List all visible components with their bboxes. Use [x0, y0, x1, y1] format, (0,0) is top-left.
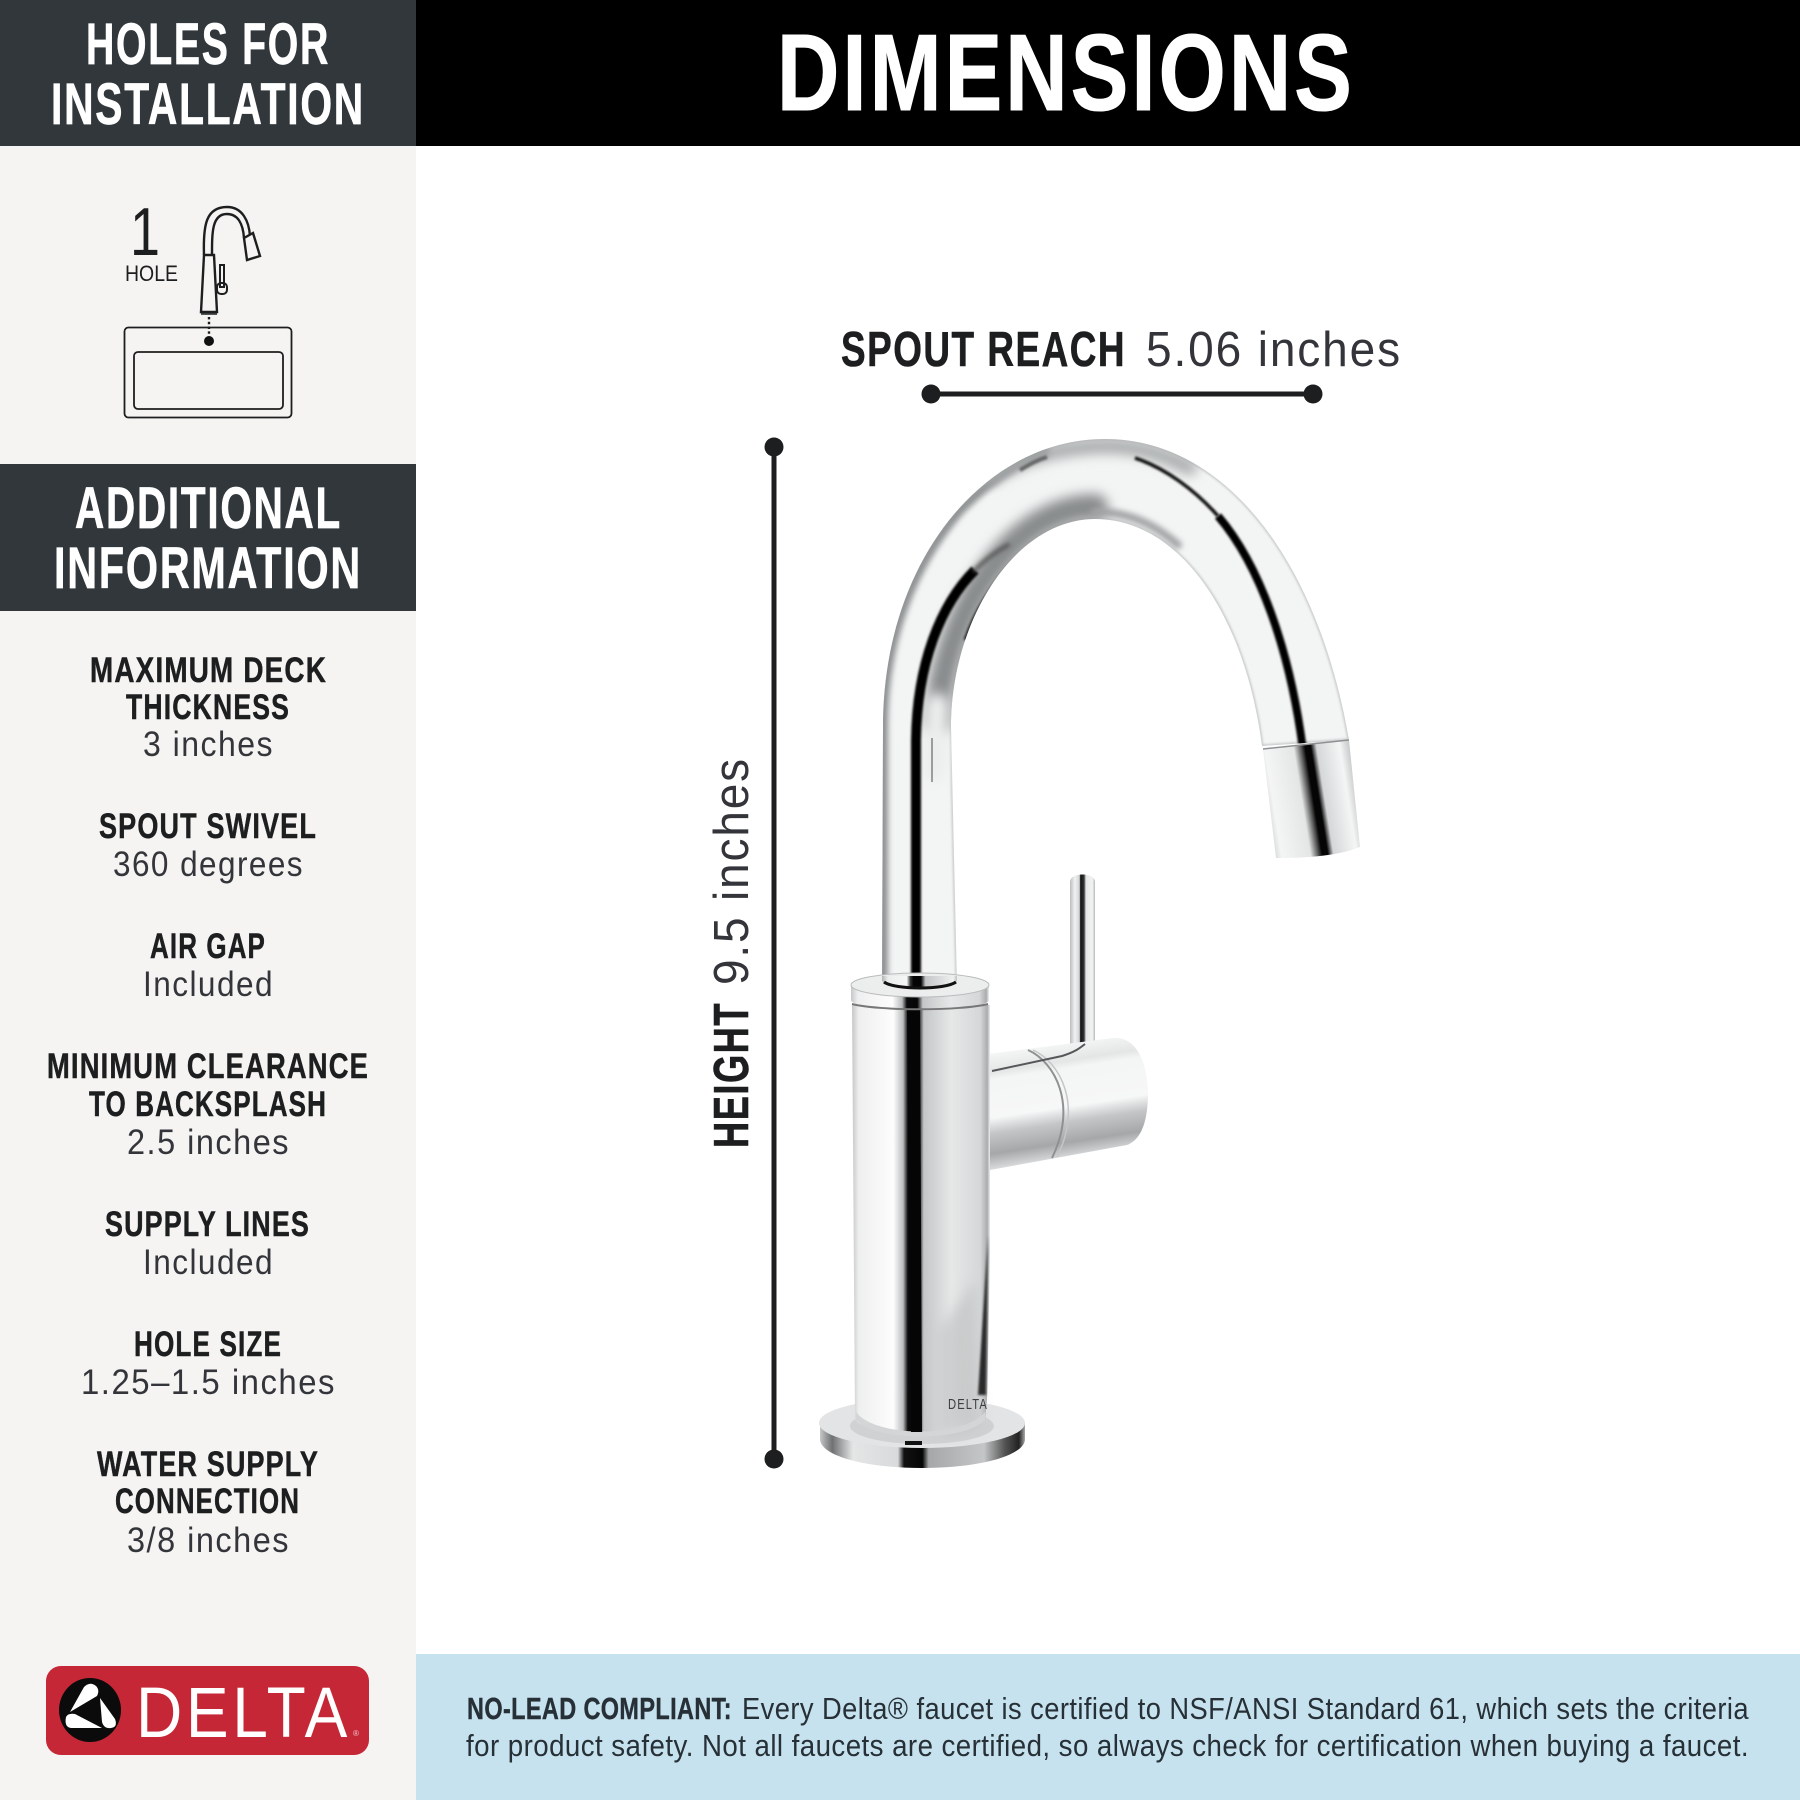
spec: minimum clearance to backsplash [47, 1047, 369, 1162]
spec: supply lines: SUPPLY LINES [105, 1205, 310, 1244]
faucet lever handle [1070, 874, 1095, 1052]
spec: air gap [143, 927, 274, 1004]
heading: holes for installation: INSTALLATION [51, 72, 365, 137]
faucet collar [851, 973, 989, 1009]
panel: no-lead compliance note [416, 1654, 1800, 1800]
logo: delta: ® [353, 1729, 359, 1738]
spec: maximum deck thickness [90, 651, 327, 764]
faucet pull-down head [1263, 740, 1360, 858]
logo: delta: DELTA [136, 1674, 351, 1753]
spec: spout swivel: 360 degrees [113, 845, 304, 884]
spec: supply lines [105, 1205, 310, 1282]
spout reach dimension: SPOUT REACH [841, 323, 1126, 377]
spec: water supply connection: 3/8 inches [127, 1521, 290, 1560]
spec: minimum clearance to backsplash: MINIMUM CLEARANCE [47, 1047, 369, 1086]
faucet illustration [819, 439, 1360, 1468]
faucet body column: DELTA [948, 1396, 988, 1413]
spout reach dimension [841, 323, 1402, 404]
heading: holes for installation [0, 0, 416, 146]
faucet body column [852, 1005, 990, 1445]
heading: holes for installation: HOLES FOR [86, 12, 330, 77]
height dimension [705, 438, 784, 1468]
height dimension: 9.5 inches [705, 757, 759, 985]
heading: additional information: INFORMATION [54, 536, 362, 601]
heading: additional information [0, 464, 416, 611]
height dimension: HEIGHT [705, 1002, 759, 1148]
spout reach dimension: 5.06 inches [1146, 323, 1402, 377]
panel: no-lead compliance note: NO-LEAD COMPLIANT: [467, 1691, 732, 1726]
spec: hole size [81, 1325, 336, 1402]
spec: water supply connection: CONNECTION [115, 1482, 300, 1521]
faucet side cylinder [988, 1038, 1148, 1170]
spec: spout swivel [99, 807, 317, 884]
spec: air gap: AIR GAP [150, 927, 266, 966]
spec: water supply connection: WATER SUPPLY [97, 1445, 319, 1484]
spec: water supply connection [97, 1445, 319, 1560]
spec: maximum deck thickness: MAXIMUM DECK [90, 651, 327, 690]
faucet base flange [819, 1398, 1025, 1468]
spec: maximum deck thickness: 3 inches [143, 725, 274, 764]
spec: air gap: Included [143, 965, 274, 1004]
spec: maximum deck thickness: THICKNESS [126, 688, 290, 727]
spec: hole size: HOLE SIZE [134, 1325, 282, 1364]
icon: one hole faucet and sink: HOLE [125, 261, 178, 286]
panel: left sidebar [0, 0, 416, 1800]
title bar: dimensions: DIMENSIONS [777, 12, 1355, 134]
spec: minimum clearance to backsplash: TO BACKSPLASH [89, 1085, 327, 1124]
heading: additional information: ADDITIONAL [75, 476, 342, 541]
title bar: dimensions [416, 0, 1800, 146]
spec: spout swivel: SPOUT SWIVEL [99, 807, 317, 846]
spec: minimum clearance to backsplash: 2.5 inches [127, 1123, 290, 1162]
icon: one hole faucet and sink: 1 [130, 194, 160, 270]
logo: delta [46, 1666, 369, 1755]
spec: hole size: 1.25–1.5 inches [81, 1363, 336, 1402]
icon: one hole faucet and sink [124, 194, 292, 418]
spec: supply lines: Included [143, 1243, 274, 1282]
faucet spout [882, 439, 1349, 990]
